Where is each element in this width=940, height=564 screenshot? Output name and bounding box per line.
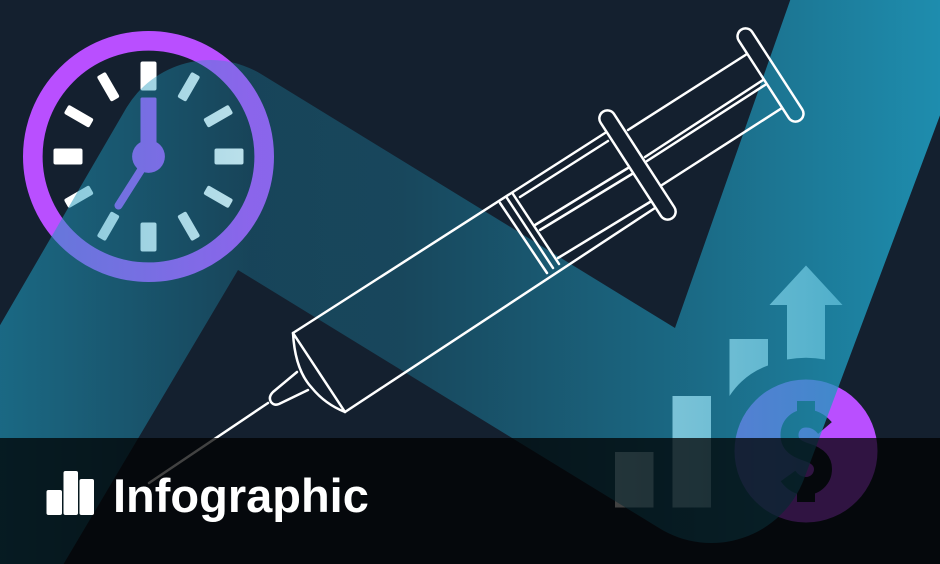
up arrow [770,266,842,360]
title: Infographic [113,469,369,522]
barrel [293,133,605,333]
bar 1 [615,452,654,508]
dark footer bar [0,438,940,564]
coin disc [734,380,878,522]
plunger rod [520,141,608,197]
barrel extension beyond flange [628,54,747,130]
icon: clock [33,41,264,272]
icon: rising bar chart with arrow [615,266,842,508]
bar 3 [730,339,768,396]
barrel tip [293,333,345,412]
nozzle [270,372,308,405]
clock hands [118,98,165,206]
dollar sign [788,401,825,502]
needle [149,403,268,483]
clock hour ticks [54,62,244,252]
footer label [46,469,369,522]
bar 2 [672,396,711,508]
end flange [734,25,807,125]
clock ring [33,41,264,272]
syringe [149,25,807,483]
icon: bar chart [46,471,94,515]
middle flange [596,107,679,223]
plunger stopper stripes [500,203,547,273]
icon: dollar coin [734,380,878,522]
